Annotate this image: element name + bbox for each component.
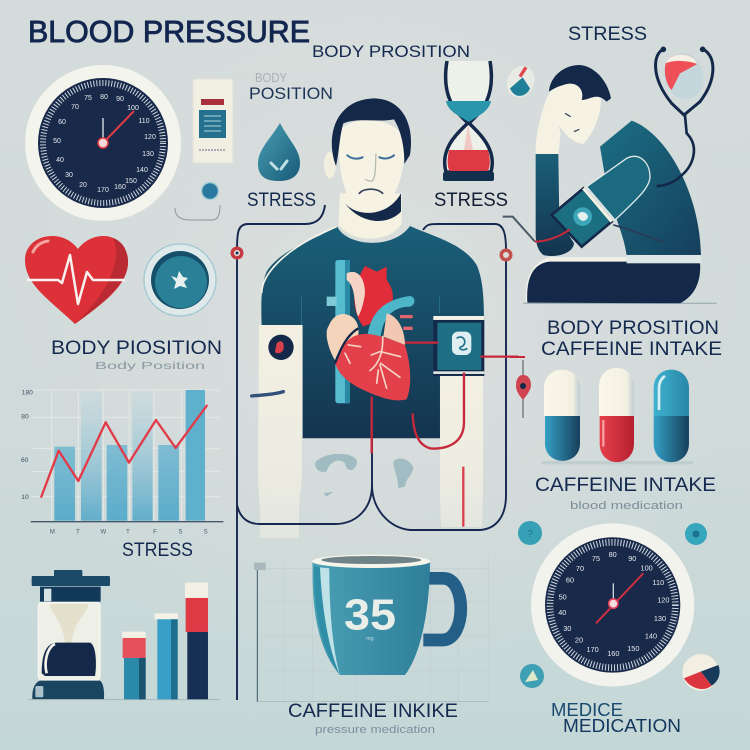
- gauge: bottom right: 60: [566, 576, 574, 585]
- labels: body prosition and caffeine right: BODY PROSITION: [547, 318, 719, 339]
- label: body piosition: BODY PIOSITION: [51, 338, 222, 359]
- mug grid: [257, 557, 488, 702]
- icon: round dial: [144, 244, 216, 316]
- mug handle: [423, 578, 461, 640]
- chart: mini stacked bars: [28, 583, 220, 700]
- torso: [600, 121, 701, 255]
- gauge: bottom right: 130: [654, 614, 666, 623]
- gauge: top left: [25, 65, 181, 221]
- labels: body prosition and caffeine right: CAFFEINE INTAKE: [541, 339, 722, 360]
- labels: medication: MEDICE: [551, 700, 623, 720]
- icon: teal dot left: ?: [527, 529, 533, 540]
- chart x labels: T: [76, 529, 80, 535]
- text: body position faint: BODY: [255, 70, 287, 85]
- man eyes: [347, 155, 394, 159]
- stethoscope: [656, 47, 713, 186]
- stethoscope pill: [659, 48, 709, 104]
- icon: water drop: [258, 123, 300, 181]
- gauge: bottom right: 110: [652, 578, 664, 587]
- gauge: bottom right: 50: [559, 592, 567, 601]
- chart y labels: 180: [22, 389, 33, 396]
- label: caffeine intake: CAFFEINE INTAKE: [535, 475, 716, 496]
- icon: round pill: [682, 654, 720, 691]
- gauge: bottom right: 120: [657, 596, 669, 605]
- gauge: top left: 110: [138, 118, 150, 125]
- gauge: top left: 170: [97, 187, 109, 194]
- heart: [327, 266, 414, 400]
- chart bars: [54, 390, 205, 521]
- heading: stress top right: STRESS: [568, 24, 647, 45]
- gauge: top left: 150: [125, 178, 137, 185]
- label: caffeine inkike: CAFFEINE INKIKE: [288, 701, 458, 722]
- arm mark: [252, 392, 283, 396]
- man collar shadow: [345, 193, 401, 221]
- gauge: bottom right: 70: [576, 564, 584, 573]
- chart x labels: T: [126, 529, 130, 535]
- label: stress left: STRESS: [247, 190, 316, 211]
- labels: body prosition and caffeine right: [541, 318, 722, 360]
- gauge: top left: 20: [79, 182, 87, 189]
- chart x labels: F: [153, 529, 157, 535]
- chart axis: [31, 520, 223, 524]
- gauge: bottom right: 90: [628, 554, 636, 563]
- gauge: top left: 80: [100, 94, 108, 101]
- icon: teal dot right: [685, 523, 707, 545]
- wires around figure: [237, 205, 506, 700]
- figure arm shapes: [258, 325, 483, 538]
- chart grid: [32, 390, 220, 521]
- mug rim: [312, 555, 431, 568]
- man shirt: [261, 226, 484, 438]
- gauge: bottom right: 40: [558, 608, 566, 617]
- chart: line over bars: [21, 389, 223, 535]
- chart y labels: 80: [21, 413, 29, 420]
- heading: body prosition top: BODY PROSITION: [312, 42, 470, 61]
- gauge: top left: 120: [144, 134, 156, 141]
- gauge: bottom right: 30: [563, 624, 571, 633]
- gauge: top left: 75: [84, 95, 92, 102]
- chart x labels: W: [100, 529, 106, 535]
- man face: [339, 120, 405, 210]
- arm cuff: [433, 316, 484, 376]
- mini bar short: [122, 632, 146, 699]
- red tubes: [372, 343, 518, 527]
- chart y labels: 10: [21, 494, 29, 501]
- legs: [527, 262, 700, 303]
- seat shadow line: [523, 302, 717, 305]
- icon: hourglass: [443, 61, 494, 181]
- connector: left red node: [230, 246, 244, 260]
- gauge: top left: 70: [71, 104, 79, 111]
- chart: mug grid with coffee cup: [254, 555, 488, 702]
- mug body: [313, 561, 430, 675]
- gauge: bottom right: 75: [592, 554, 600, 563]
- eye and mouth: [565, 113, 579, 132]
- capsule teal: [654, 370, 689, 462]
- mug value: 35: [344, 591, 396, 639]
- gauge: top left: 90: [116, 96, 124, 103]
- icon: jar hourglass: [32, 570, 110, 699]
- label: body position faint: Body Position: [95, 361, 205, 372]
- label: blood medication faint: blood medication: [570, 500, 683, 512]
- icon: small pill top: [502, 62, 540, 102]
- chart x labels: [50, 529, 208, 535]
- gauge: bottom right: 170: [587, 645, 599, 654]
- blood pressure cuff: [552, 188, 612, 247]
- knee marks: [315, 454, 413, 497]
- label: stress right: STRESS: [434, 190, 508, 211]
- icon: monitor device: [193, 79, 233, 163]
- arm badge: [268, 335, 294, 360]
- gauge: bottom right: 100: [641, 563, 653, 572]
- text: body position faint: POSITION: [249, 84, 333, 103]
- title: BLOOD PRESSURE: [28, 14, 310, 49]
- connector: right red node: [500, 248, 512, 262]
- gauge: bottom right: 80: [609, 550, 617, 559]
- icon: capsules: [542, 368, 693, 463]
- chart x labels: S: [178, 529, 182, 535]
- icon: teal dot left: [518, 521, 542, 545]
- gauge: top left: 100: [127, 105, 139, 112]
- mini bar medium: [155, 613, 178, 699]
- gauge: bottom right: 140: [645, 631, 657, 640]
- chart trend line: [41, 405, 207, 498]
- upper arm: [587, 156, 650, 220]
- gauge: top left: 60: [58, 119, 66, 126]
- vein column: [327, 260, 350, 403]
- man nose and mouth: [359, 153, 383, 193]
- label: pressure medication faint: pressure medication: [315, 724, 435, 736]
- tubes: [503, 217, 663, 242]
- icon: blue dot with cable: [175, 182, 220, 220]
- figure: man with heart: [252, 98, 518, 527]
- mug axis: [254, 563, 488, 702]
- mini bar tall: [185, 583, 208, 699]
- gauge: bottom right: [531, 523, 694, 687]
- gauge: top left: 140: [136, 167, 148, 174]
- chart y labels: [21, 389, 33, 501]
- hair: [549, 65, 611, 102]
- gauge: top left: 30: [65, 172, 73, 179]
- gauge: bottom right: 20: [575, 636, 583, 645]
- label: stress bottom left: STRESS: [122, 540, 193, 561]
- labels: medication: [551, 700, 681, 736]
- man hair: [332, 98, 411, 166]
- icon: teal dot bottom: [520, 664, 544, 688]
- chart y labels: 60: [21, 457, 29, 464]
- raised hand: [536, 92, 561, 154]
- gauge: top left: 50: [53, 138, 61, 145]
- text: body position faint: [249, 70, 333, 103]
- man neck: [338, 193, 402, 239]
- icon: heart with pulse: [25, 236, 128, 324]
- figure: seated stressed man: [503, 47, 717, 303]
- gauge: top left: 160: [114, 184, 126, 191]
- red pin connector: [510, 357, 531, 418]
- belt: [627, 255, 701, 263]
- stool: [526, 257, 628, 303]
- gauge: top left: 130: [142, 151, 154, 158]
- gauge: bottom right: 150: [627, 644, 639, 653]
- mug unit: mg: [366, 636, 374, 642]
- capsule blue: [544, 370, 580, 461]
- gauge: bottom right: 160: [607, 649, 619, 658]
- labels: medication: MEDICATION: [563, 716, 681, 736]
- chart x labels: M: [50, 529, 55, 535]
- forearm: [536, 154, 574, 256]
- chart x labels: S: [204, 529, 208, 535]
- head: [550, 82, 601, 144]
- man ear: [324, 152, 336, 178]
- gauge: top left: 40: [56, 157, 64, 164]
- capsule red: [599, 368, 634, 462]
